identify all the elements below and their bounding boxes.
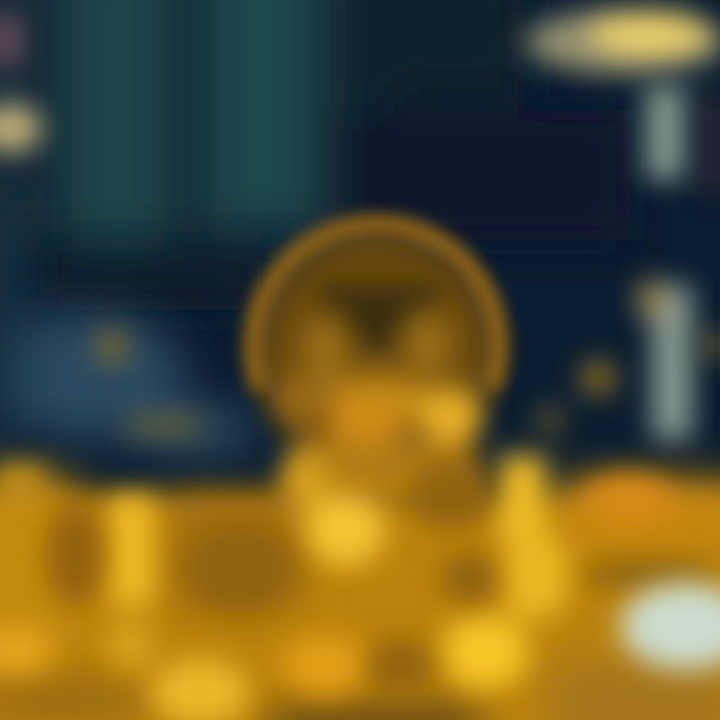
bright highlights: [0, 450, 674, 720]
gold coin pile: [0, 450, 720, 720]
lamp posts: [637, 85, 692, 440]
top-left cream and pink glow: [0, 12, 42, 152]
lower left blue-grey shapes: [0, 200, 260, 456]
background columns: [0, 0, 624, 262]
lamp top right: [525, 10, 720, 195]
coin emblem: [275, 285, 482, 510]
dark gaps between coins: [47, 461, 720, 691]
white reflection bottom right: [620, 582, 720, 670]
small gold sparkles: [95, 330, 720, 435]
central coin: [254, 225, 498, 510]
